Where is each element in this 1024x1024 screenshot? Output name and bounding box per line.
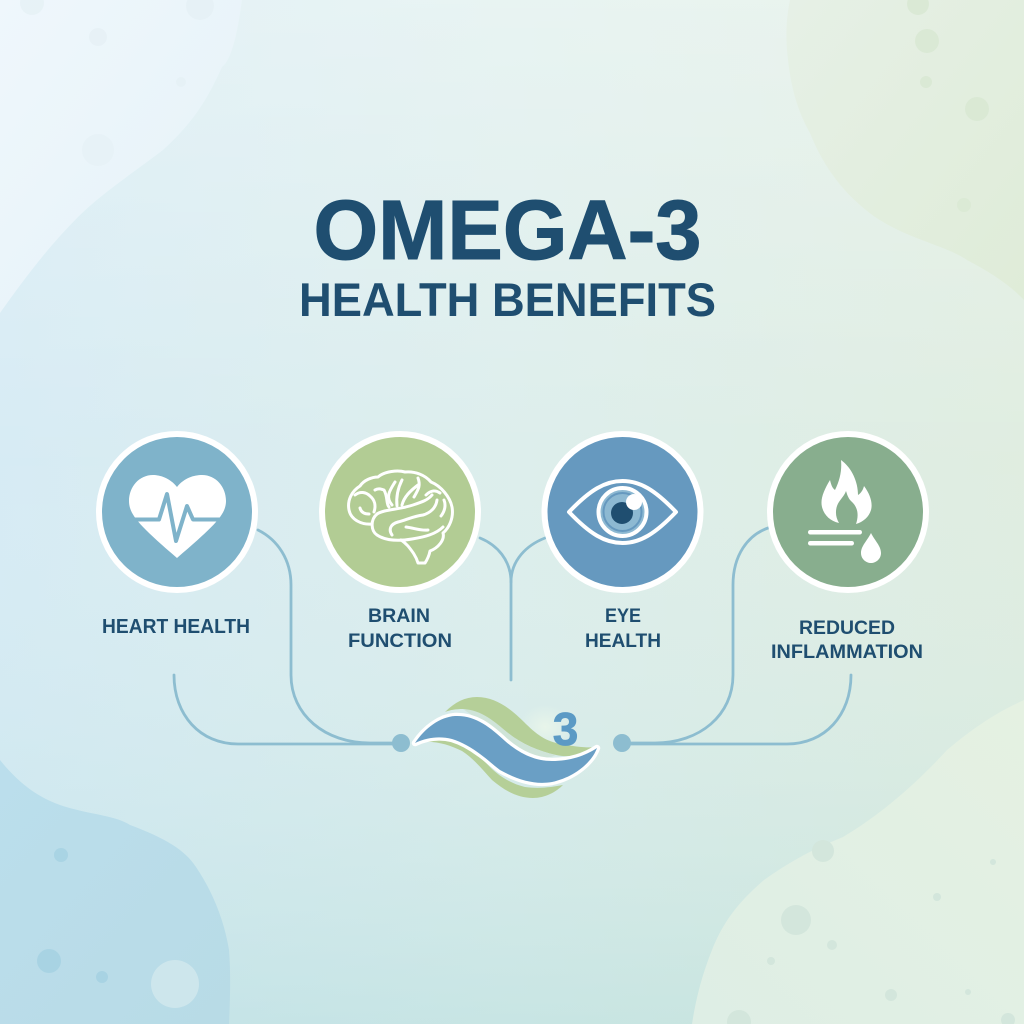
icon: brain (349, 471, 452, 563)
label: reduced inflammation: INFLAMMATION (771, 642, 923, 663)
label: eye health: HEALTH (585, 631, 661, 652)
connector lines (174, 528, 851, 744)
omega-3 numeral: 3 (553, 703, 578, 755)
heart badge (99, 434, 255, 590)
title: OMEGA-3: OMEGA-3 (314, 183, 702, 277)
label: brain function (348, 606, 452, 652)
label: eye health: EYE (605, 606, 641, 627)
icon: eye (569, 481, 676, 543)
brain badge (322, 434, 478, 590)
panel: eye health (544, 434, 700, 652)
label: eye health (585, 606, 661, 652)
inflammation badge (770, 434, 926, 590)
icon: flame and droplet (808, 460, 881, 563)
panel: brain function (322, 434, 478, 652)
omega-3 wave logo (415, 697, 598, 798)
label: brain function: BRAIN (368, 606, 430, 627)
label: brain function: FUNCTION (348, 631, 452, 652)
connector node right (613, 734, 631, 752)
subtitle: health benefits: HEALTH BENEFITS (299, 273, 716, 326)
label: heart health: HEART HEALTH (102, 616, 250, 638)
label: reduced inflammation (771, 618, 923, 663)
panel: reduced inflammation (770, 434, 926, 663)
connector node left (392, 734, 410, 752)
eye badge (544, 434, 700, 590)
icon: heart with pulse (128, 475, 228, 558)
label: reduced inflammation: REDUCED (799, 618, 895, 639)
panel: heart health (99, 434, 255, 638)
